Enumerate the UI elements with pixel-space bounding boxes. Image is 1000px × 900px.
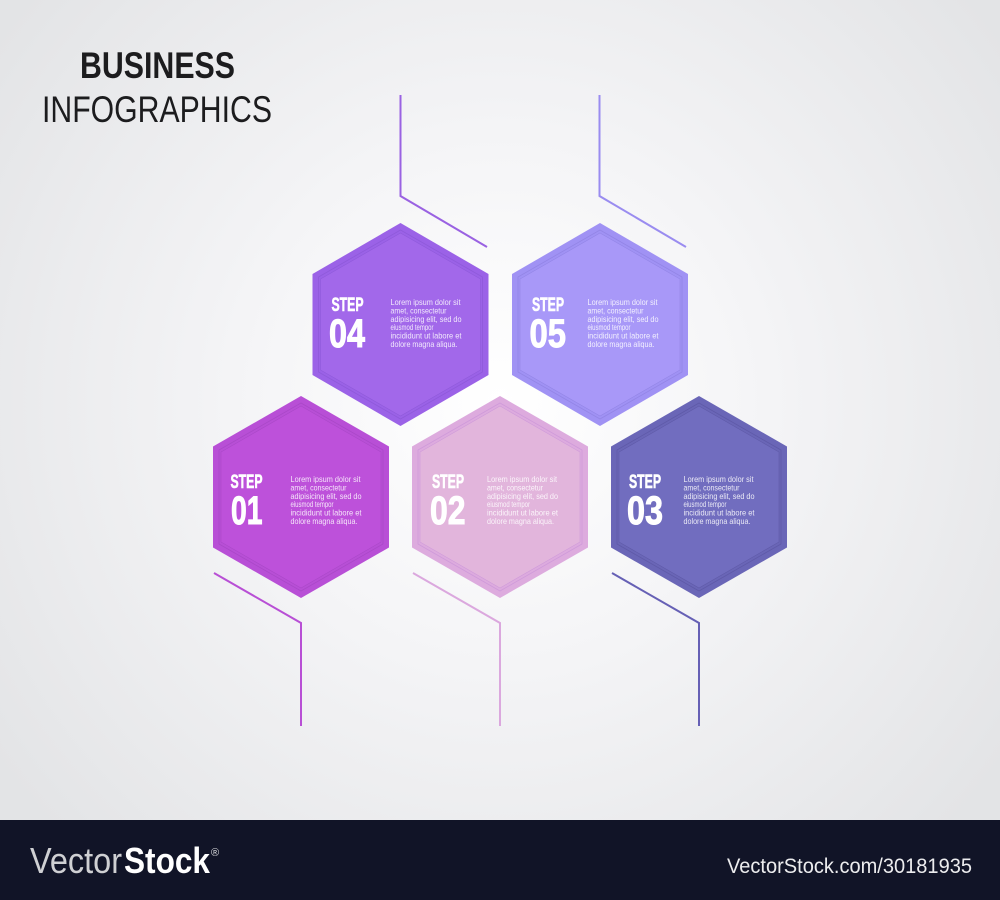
title: BUSINESS [80, 44, 235, 86]
step 02 description: dolore magna aliqua. [487, 516, 554, 526]
connector line: step 03 [612, 573, 699, 726]
step 05 description [588, 297, 659, 349]
step 05 description: incididunt ut labore et [588, 331, 659, 341]
step 01 description [290, 474, 362, 526]
step 01 description: eiusmod tempor [290, 499, 334, 509]
step 01 label: STEP [230, 471, 262, 493]
step 04 description [390, 297, 462, 349]
title: INFOGRAPHICS [42, 88, 272, 130]
connector line: step 05 [600, 95, 686, 247]
step 01 description: adipisicing elit, sed do [290, 491, 362, 501]
step 01 description: incididunt ut labore et [290, 508, 362, 518]
step 01 description: dolore magna aliqua. [290, 516, 358, 526]
step 03 label: STEP [629, 471, 661, 493]
footer band [0, 820, 1000, 900]
footer logo [30, 840, 219, 881]
step 04 description: eiusmod tempor [390, 322, 434, 332]
step 02 description: eiusmod tempor [487, 499, 530, 509]
panel: step 03 hexagon [611, 396, 787, 598]
step 04 description: Lorem ipsum dolor sit [390, 297, 461, 307]
step 04 description: adipisicing elit, sed do [390, 314, 462, 324]
connector line: step 02 [413, 573, 500, 726]
step 02 number: 02 [430, 489, 466, 533]
step 04 label: STEP [332, 294, 364, 316]
connector line: step 04 [400, 95, 487, 247]
step 02 description: amet, consectetur [487, 482, 543, 492]
footer logo: Vector [30, 840, 122, 881]
step 01 number: 01 [231, 489, 262, 533]
panel: step 05 hexagon [512, 223, 688, 426]
step 05 description: amet, consectetur [588, 305, 644, 315]
panel: step 04 hexagon [312, 223, 488, 426]
step 03 description [684, 474, 755, 526]
step 05 description: Lorem ipsum dolor sit [588, 297, 658, 307]
step 03 description: amet, consectetur [684, 482, 740, 492]
step 02 description [487, 474, 559, 526]
footer logo: ® [211, 847, 219, 859]
step 04 description: dolore magna aliqua. [390, 339, 458, 349]
step 05 label: STEP [532, 294, 564, 316]
step 03 description: adipisicing elit, sed do [684, 491, 755, 501]
step 02 description: incididunt ut labore et [487, 508, 559, 518]
title [42, 44, 272, 130]
step 02 description: Lorem ipsum dolor sit [487, 474, 558, 484]
step 05 description: adipisicing elit, sed do [588, 314, 659, 324]
step 05 description: eiusmod tempor [588, 322, 631, 332]
step 04 description: amet, consectetur [390, 305, 447, 315]
step 03 description: Lorem ipsum dolor sit [684, 474, 754, 484]
step 03 description: incididunt ut labore et [684, 508, 755, 518]
step 01 description: Lorem ipsum dolor sit [290, 474, 361, 484]
step 03 description: dolore magna aliqua. [684, 516, 750, 526]
step 02 label: STEP [432, 471, 464, 493]
step 05 number: 05 [530, 312, 566, 356]
panel: step 02 hexagon [412, 396, 588, 598]
step 01 description: amet, consectetur [290, 482, 347, 492]
step 03 description: eiusmod tempor [684, 499, 727, 509]
step 03 number: 03 [627, 489, 663, 533]
step 04 number: 04 [329, 312, 366, 356]
connector line: step 01 [214, 573, 301, 726]
footer image id: VectorStock.com/30181935 [727, 854, 972, 878]
step 04 description: incididunt ut labore et [390, 331, 462, 341]
step 05 description: dolore magna aliqua. [588, 339, 654, 349]
panel: step 01 hexagon [213, 396, 389, 598]
step 02 description: adipisicing elit, sed do [487, 491, 558, 501]
footer logo: Stock [124, 840, 211, 881]
